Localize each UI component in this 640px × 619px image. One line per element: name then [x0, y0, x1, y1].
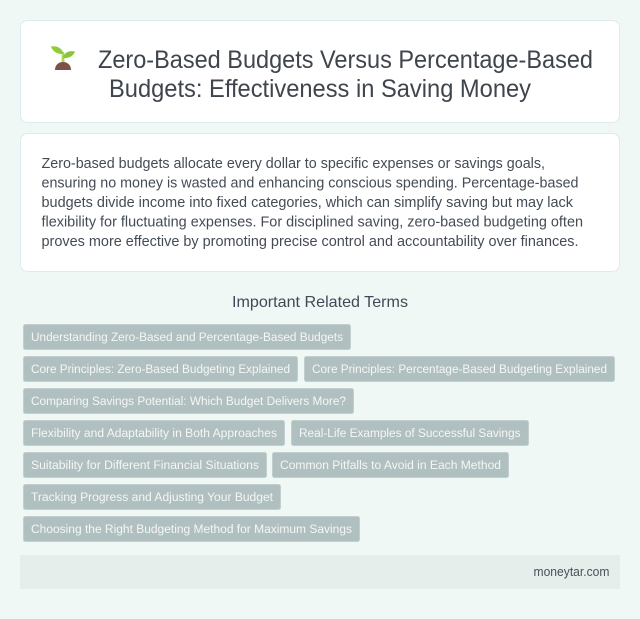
- tag: Core Principles: Percentage-Based Budgeting Explained: [312, 362, 607, 376]
- icon: seedling: [51, 46, 75, 70]
- summary text: [42, 155, 583, 250]
- tag: Choosing the Right Budgeting Method for Maximum Savings: [31, 522, 352, 536]
- tag: Comparing Savings Potential: Which Budget Delivers More?: [31, 394, 346, 408]
- tag: [24, 484, 280, 510]
- tag: Understanding Zero-Based and Percentage-Based Budgets: [31, 330, 343, 344]
- tag: Suitability for Different Financial Situations: [31, 458, 259, 472]
- tag: [304, 356, 614, 382]
- summary text: flexibility for fluctuating expenses. For disciplined saving, zero-based budgeting often: [42, 214, 583, 230]
- title: Zero-Based Budgets Versus Percentage-Based: [98, 46, 593, 74]
- title: [98, 46, 593, 103]
- tag: [272, 452, 508, 478]
- tag: [24, 452, 266, 478]
- tag list: [24, 324, 614, 542]
- tag: [24, 516, 360, 542]
- panel: title card: [20, 20, 620, 122]
- tag: [24, 388, 354, 414]
- tag: Common Pitfalls to Avoid in Each Method: [280, 458, 501, 472]
- summary text: budgets divide income into fixed categories, which can simplify saving but may lack: [42, 194, 573, 211]
- footer bar: [20, 555, 620, 589]
- panel: summary card: [20, 134, 620, 272]
- heading: important related terms: Important Related Terms: [232, 294, 408, 311]
- tag: [24, 324, 350, 350]
- tag: Tracking Progress and Adjusting Your Budget: [31, 490, 274, 504]
- tag: [292, 420, 528, 446]
- tag: [24, 420, 284, 446]
- summary text: Zero-based budgets allocate every dollar to specific expenses or savings goals,: [42, 155, 545, 172]
- tag: Real-Life Examples of Successful Savings: [299, 426, 520, 440]
- tag: Core Principles: Zero-Based Budgeting Explained: [31, 362, 290, 376]
- tag: Flexibility and Adaptability in Both Approaches: [31, 426, 277, 440]
- footer source: moneytar.com: [534, 565, 610, 579]
- title: Budgets: Effectiveness in Saving Money: [109, 75, 531, 103]
- tag: [24, 356, 298, 382]
- summary text: proves more effective by promoting precise control and accountability over finances.: [42, 233, 578, 250]
- summary text: ensuring no money is wasted and enhancing conscious spending. Percentage-based: [42, 174, 578, 192]
